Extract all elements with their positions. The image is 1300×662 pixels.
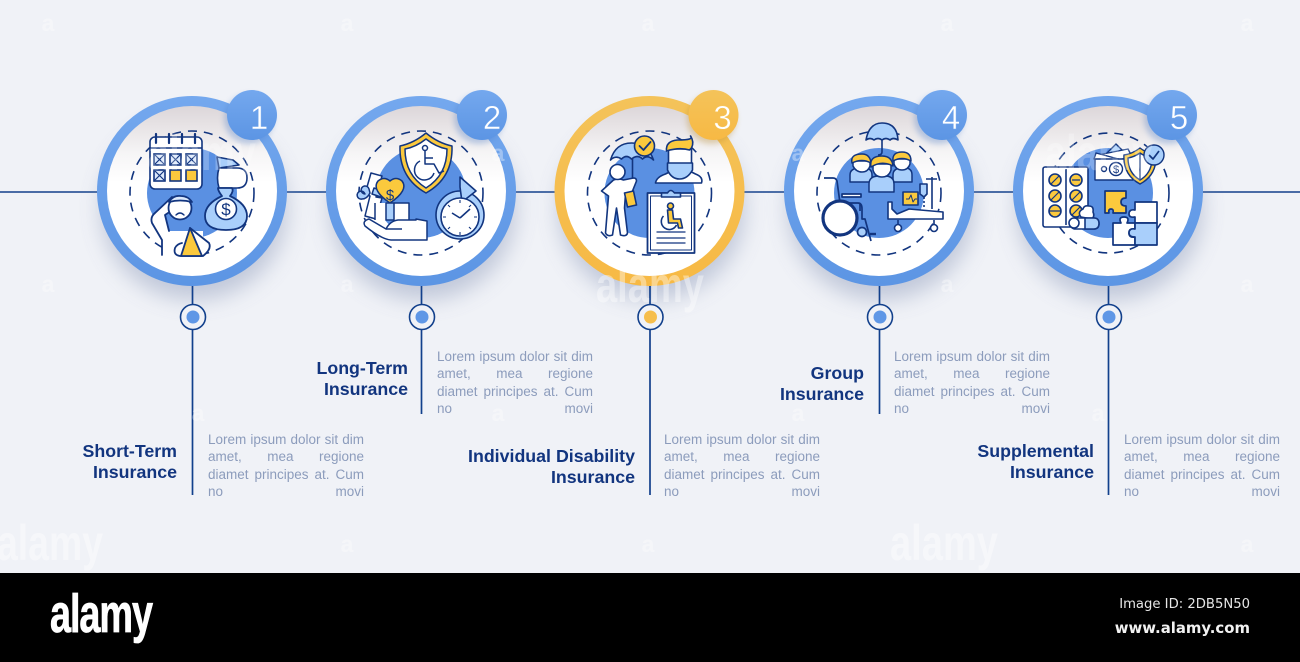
text block: long-term insurance: Long-Term	[316, 358, 408, 378]
text block: supplemental insurance	[977, 432, 1280, 499]
watermark overlay: a	[492, 140, 505, 166]
watermark overlay: a	[642, 10, 655, 36]
watermark overlay: alamy	[596, 257, 704, 313]
text block: individual disability insurance: amet, mea regione	[664, 449, 820, 464]
alamy logo: alamy	[50, 584, 152, 644]
text block: group insurance: diamet principes at. Cum	[894, 384, 1050, 399]
watermark overlay: a	[42, 10, 55, 36]
number badge 4: 4	[942, 99, 960, 136]
watermark overlay: a	[941, 10, 954, 36]
watermark overlay: alamy	[890, 515, 998, 571]
icon: clipboard with wheelchair form	[648, 190, 694, 253]
text block: supplemental insurance: no movi	[1124, 484, 1280, 499]
watermark overlay: a	[941, 271, 954, 297]
watermark overlay: a	[341, 10, 354, 36]
icon: pill blister pack	[1043, 167, 1099, 229]
watermark overlay: a	[1092, 400, 1105, 426]
text block: group insurance: amet, mea regione	[894, 366, 1050, 381]
step 2 circle with icon	[326, 90, 516, 300]
watermark overlay: alamy	[1045, 125, 1153, 181]
watermark overlay: a	[192, 400, 205, 426]
number badge 3: 3	[713, 99, 732, 136]
watermark overlay: a	[341, 531, 354, 557]
watermark overlay: a	[42, 271, 55, 297]
text block: long-term insurance: diamet principes at. Cum	[437, 384, 593, 399]
number badge 5	[1144, 90, 1197, 144]
text block: individual disability insurance	[468, 432, 820, 499]
watermark overlay: a	[341, 271, 354, 297]
icon: gift in hand: $	[386, 187, 395, 204]
text block: individual disability insurance: Lorem ipsum dolor sit dim	[664, 432, 820, 447]
icon: money bag with hand: $	[221, 200, 231, 219]
watermark overlay: a	[1241, 271, 1254, 297]
icon: umbrella	[866, 123, 898, 155]
icon: calendar	[150, 134, 202, 189]
text block: group insurance: no movi	[894, 401, 1050, 416]
icon: shield with check	[1124, 145, 1164, 184]
step 3 stem and marker	[638, 286, 663, 495]
text block: long-term insurance: amet, mea regione	[437, 366, 593, 381]
step 1 circle with icon	[97, 90, 287, 300]
text block: short-term insurance	[82, 432, 364, 499]
website url: www.alamy.com	[1115, 619, 1250, 637]
text block: supplemental insurance: diamet principes at. Cum	[1124, 467, 1280, 482]
watermark overlay: a	[642, 531, 655, 557]
watermark overlay: a	[792, 140, 805, 166]
text block: supplemental insurance: Supplemental	[977, 441, 1094, 461]
icon: wheelchair	[823, 178, 876, 241]
text block: individual disability insurance: Insurance	[551, 467, 635, 487]
horizontal connector line	[0, 191, 1300, 193]
icon: money banknotes: $	[1113, 164, 1119, 176]
number badge 2	[454, 90, 507, 144]
text block: group insurance: Insurance	[780, 384, 864, 404]
number badge 2: 2	[483, 99, 501, 136]
watermark overlay: a	[492, 400, 505, 426]
text block: group insurance: Group	[811, 363, 864, 383]
icon: injured person	[151, 196, 210, 256]
text block: short-term insurance: Insurance	[93, 462, 177, 482]
step 1 stem and marker	[180, 286, 206, 495]
text block: long-term insurance	[316, 349, 593, 416]
text block: group insurance: Lorem ipsum dolor sit dim	[894, 349, 1050, 364]
number badge 4	[914, 90, 967, 144]
text block: individual disability insurance: Individual Disability	[468, 446, 635, 466]
step 5 circle with icon	[1013, 90, 1203, 300]
step 2 stem and marker	[410, 286, 434, 414]
image id: Image ID: 2DB5N50	[1119, 597, 1250, 612]
icon: person under umbrella	[602, 136, 654, 236]
text block: individual disability insurance: no movi	[664, 484, 820, 499]
icon: money bag with hand	[205, 157, 247, 230]
text block: short-term insurance: amet, mea regione	[208, 449, 364, 464]
text block: supplemental insurance: Insurance	[1010, 462, 1094, 482]
icon: three people	[850, 152, 912, 192]
number badge 1	[224, 90, 277, 144]
number badge 1: 1	[250, 99, 268, 136]
watermark overlay: alamy	[148, 125, 256, 181]
text block: supplemental insurance: Lorem ipsum dolor sit dim	[1124, 432, 1280, 447]
icon: hospital bed with drip	[888, 177, 943, 232]
watermark overlay: a	[1241, 531, 1254, 557]
text block: individual disability insurance: diamet principes at. Cum	[664, 467, 820, 482]
text block: short-term insurance: Lorem ipsum dolor sit dim	[208, 432, 364, 447]
step 5 stem and marker	[1096, 286, 1122, 495]
icon: money banknotes	[1094, 144, 1133, 180]
step 4 circle with icon	[784, 90, 974, 300]
watermark overlay: alamy	[0, 515, 103, 571]
text block: short-term insurance: Short-Term	[82, 441, 177, 461]
number badge 5: 5	[1170, 99, 1188, 136]
number badge 3	[686, 90, 738, 144]
footer bar	[0, 573, 1300, 662]
watermark overlay: a	[792, 400, 805, 426]
text block: long-term insurance: no movi	[437, 401, 593, 416]
icon: gift in hand	[357, 173, 427, 240]
icon: puzzle pieces	[1105, 191, 1157, 245]
text block: short-term insurance: no movi	[208, 484, 364, 499]
icon: shield with wheelchair	[400, 133, 452, 193]
text block: long-term insurance: Lorem ipsum dolor sit dim	[437, 349, 593, 364]
text block: long-term insurance: Insurance	[324, 379, 408, 399]
text block: group insurance	[780, 349, 1050, 416]
icon: clock with arrow	[436, 177, 484, 239]
text block: supplemental insurance: amet, mea regione	[1124, 449, 1280, 464]
watermark overlay: a	[1241, 10, 1254, 36]
step 3 circle with icon	[554, 90, 744, 300]
icon: doctor with mask	[656, 136, 702, 183]
step 4 stem and marker	[868, 286, 892, 414]
text block: short-term insurance: diamet principes at. Cum	[208, 467, 364, 482]
